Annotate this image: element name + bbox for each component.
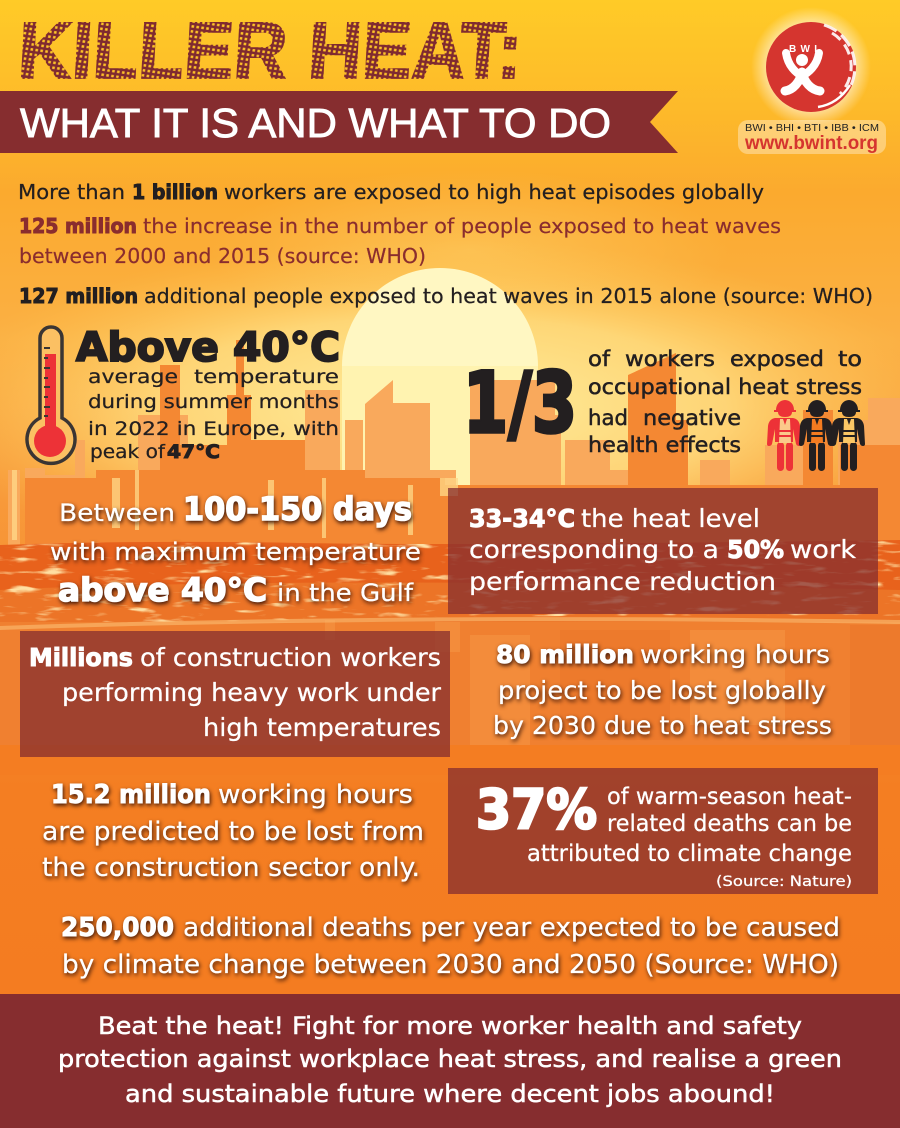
text: workers heat stress: exposed <box>730 347 824 371</box>
stat: above 40C: 47°C <box>167 441 220 463</box>
stat: above 40C: average <box>88 366 178 388</box>
panel: millions of construction workers: of construction workers <box>140 643 441 672</box>
text: 100-150 days: 100-150 days <box>183 490 412 528</box>
text: 100-150 days: Between <box>59 499 175 527</box>
banner: call to action: and sustainable future where decent jobs abound! <box>125 1080 775 1108</box>
text: workers heat stress: health effects <box>588 433 741 457</box>
text: 15.2 million working hours: the construction sector only. <box>42 853 420 883</box>
text: 125 million increase: between 2000 and 2015 (source: WHO) <box>19 244 426 268</box>
ribbon heading: WHAT IT IS AND WHAT TO DO <box>20 100 611 146</box>
text: workers heat stress: to <box>838 347 862 371</box>
panel: millions of construction workers <box>20 631 450 757</box>
background: parched land band and water reflection <box>0 540 900 745</box>
text: 100-150 days <box>50 490 421 609</box>
logo: BWI <box>738 7 886 154</box>
text: workers heat stress: had <box>588 406 628 430</box>
stat: above 40C: Above 40°C <box>76 325 340 371</box>
text: workers heat stress: negative <box>643 406 741 430</box>
text: 127 million additional: 127 million <box>19 284 138 308</box>
text: 250,000 additional deaths <box>61 913 840 980</box>
text: 125 million increase <box>19 214 781 268</box>
panel: millions of construction workers: performing heavy work under <box>62 678 442 707</box>
icon: thermometer <box>27 327 75 463</box>
stat: above 40C: peak of <box>90 441 166 463</box>
panel: 37 percent deaths: of warm-season heat- <box>607 784 852 810</box>
stat: above 40C <box>76 325 340 463</box>
text: 125 million increase: the increase in the number of people exposed to heat waves <box>143 214 781 238</box>
ribbon heading <box>0 91 678 153</box>
text: 80 million working hours: project to be lost globally <box>498 676 826 705</box>
stat: above 40C: in 2022 in Europe, with <box>88 418 339 440</box>
text: 80 million working hours: 80 million <box>496 640 634 669</box>
panel: 33-34C work performance <box>448 488 878 614</box>
text: 1 billion workers: 1 billion <box>132 180 218 204</box>
stat: above 40C: during summer months <box>88 391 339 413</box>
panel: 37 percent deaths: (Source: Nature) <box>716 874 852 890</box>
logo: BWI: BWI <box>789 44 817 55</box>
text: 80 million working hours: by 2030 due to heat stress <box>493 711 832 740</box>
panel: 33-34C work performance: corresponding to a <box>469 535 719 564</box>
panel: 37 percent deaths: attributed to climate change <box>527 841 852 867</box>
text: workers heat stress <box>588 347 862 457</box>
logo: BWI: www.bwint.org <box>744 133 878 154</box>
panel: millions of construction workers: high temperatures <box>203 713 441 742</box>
panel: millions of construction workers: Millions <box>29 643 133 672</box>
text: 80 million working hours: working hours <box>640 640 830 669</box>
text: 1 billion workers: workers are exposed to high heat episodes globally <box>224 180 764 204</box>
text: 127 million additional: additional people exposed to heat waves in 2015 alone (source: WHO) <box>144 284 873 308</box>
text: 250,000 additional deaths: by climate change between 2030 and 2050 (Source: WHO) <box>62 950 839 980</box>
text: workers heat stress: occupational heat stress <box>588 375 862 399</box>
text: 80 million working hours <box>493 640 832 740</box>
banner: call to action: protection against workplace heat stress, and realise a green <box>58 1045 842 1073</box>
icon: three workers <box>767 400 865 471</box>
panel: 33-34C work performance: 33-34°C <box>469 504 575 533</box>
text: 100-150 days: in the Gulf <box>277 579 414 607</box>
panel: 37 percent deaths <box>448 768 878 894</box>
text: 250,000 additional deaths: 250,000 <box>61 913 174 943</box>
logo: BWI: BWI • BHI • BTI • IBB • ICM <box>745 123 879 134</box>
panel: 37 percent deaths: related deaths can be <box>607 811 852 837</box>
text: 1 billion workers <box>18 180 764 204</box>
banner: call to action: Beat the heat! Fight for more worker health and safety <box>98 1012 802 1040</box>
stat: one third: 1/3 <box>463 354 577 452</box>
text: 15.2 million working hours: are predicted to be lost from <box>42 817 424 847</box>
panel: 33-34C work performance: the heat level <box>581 504 760 533</box>
panel: 33-34C work performance: 50% <box>727 535 784 564</box>
text: workers heat stress: workers <box>625 347 715 371</box>
text: 100-150 days: above 40°C <box>58 571 267 609</box>
text: 125 million increase: 125 million <box>19 214 137 238</box>
background: sun and city skyline <box>0 170 900 580</box>
text: 250,000 additional deaths: additional deaths per year expected to be caused <box>183 913 840 943</box>
panel: 33-34C work performance: performance reduction <box>469 567 776 596</box>
text: 1 billion workers: More than <box>18 180 125 204</box>
panel: 37 percent deaths: 37% <box>476 778 597 841</box>
text: workers heat stress: of <box>588 347 611 371</box>
text: 15.2 million working hours <box>42 780 424 883</box>
text: 100-150 days: with maximum temperature <box>50 538 421 566</box>
title: Killer Heat: KILLER HEAT: <box>16 6 525 95</box>
text: 15.2 million working hours: working hours <box>218 780 413 810</box>
text: 15.2 million working hours: 15.2 million <box>51 780 211 810</box>
panel: 33-34C work performance: work <box>790 535 857 564</box>
stat: above 40C: temperature <box>194 366 339 388</box>
banner: call to action <box>0 994 900 1128</box>
